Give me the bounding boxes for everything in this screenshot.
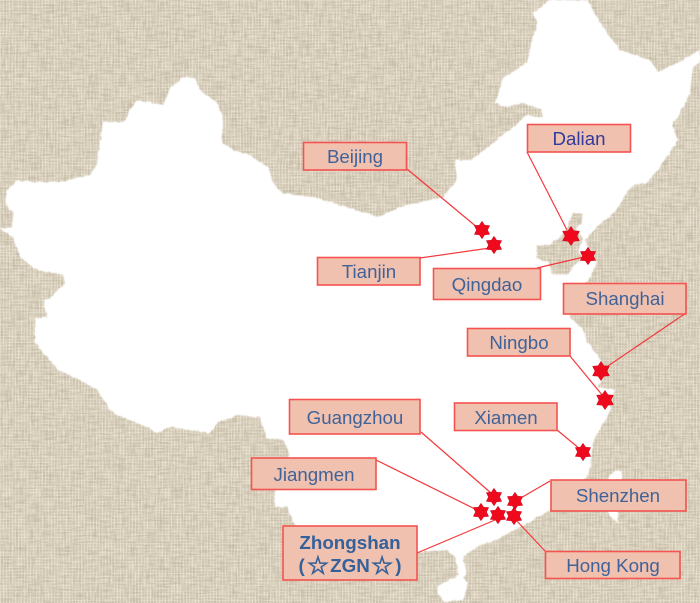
label: Shanghai	[564, 284, 686, 314]
star: Shenzhen	[507, 492, 523, 510]
label: Shanghai: Shanghai	[586, 288, 664, 309]
star: Beijing	[474, 221, 490, 239]
label: Jiangmen: Jiangmen	[273, 464, 355, 485]
label: Dalian: Dalian	[553, 128, 605, 149]
label: Qingdao	[434, 268, 540, 300]
label: Ningbo: Ningbo	[489, 332, 549, 353]
label: Zhongshan (ZGN): ☆	[307, 551, 329, 580]
label: Zhongshan (ZGN): Zhongshan	[299, 532, 401, 553]
label: Shenzhen	[551, 480, 686, 511]
star: Qingdao	[580, 247, 596, 265]
star: Dalian	[563, 226, 579, 246]
label: Qingdao: Qingdao	[452, 274, 522, 295]
label: Tianjin: Tianjin	[342, 261, 396, 282]
star: Shanghai	[593, 361, 609, 381]
leader lines	[376, 152, 686, 553]
label: Guangzhou: Guangzhou	[307, 407, 403, 428]
label: Zhongshan (ZGN)	[283, 526, 417, 580]
label: Jiangmen	[252, 458, 376, 490]
star: Guangzhou	[486, 488, 502, 506]
star: Tianjin	[486, 236, 502, 254]
label: Guangzhou	[290, 400, 420, 434]
label: Ningbo	[468, 328, 570, 356]
label: Xiamen	[454, 403, 557, 430]
star: Jiangmen	[473, 503, 489, 521]
label: Hong Kong	[546, 552, 680, 578]
label: Zhongshan (ZGN): ZGN	[330, 555, 370, 576]
label: Dalian	[528, 124, 630, 152]
label: Zhongshan (ZGN): )	[395, 555, 402, 576]
label: Beijing: Beijing	[327, 146, 383, 167]
star: Xiamen	[575, 443, 591, 461]
label: Xiamen: Xiamen	[474, 407, 538, 428]
label: Shenzhen: Shenzhen	[576, 485, 660, 506]
star: Hong Kong	[506, 507, 522, 525]
label: Hong Kong: Hong Kong	[566, 555, 660, 576]
label: Zhongshan (ZGN): ☆	[371, 551, 393, 580]
label: Zhongshan (ZGN): (	[298, 555, 305, 576]
star: Ningbo	[597, 390, 613, 410]
star: Zhongshan	[490, 506, 506, 524]
label: Tianjin	[318, 258, 420, 285]
label: Beijing	[304, 142, 406, 170]
